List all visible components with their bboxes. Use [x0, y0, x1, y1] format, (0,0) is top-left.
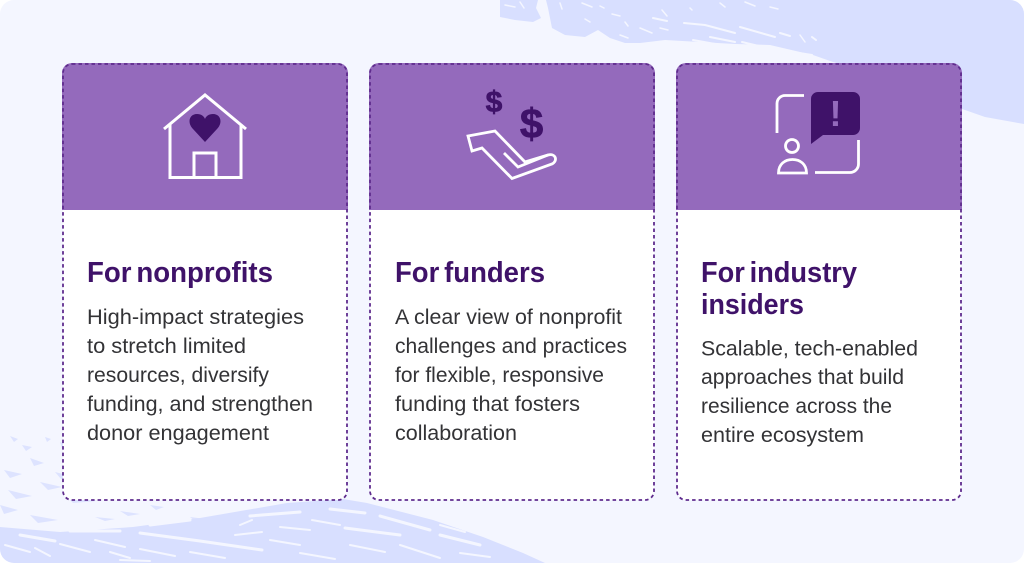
icon: person with alert bubble: [777, 92, 860, 173]
text: nonprofits description: donor engagement: [87, 421, 269, 445]
card: for industry insiders: [676, 63, 962, 500]
text: nonprofits description: resources, diversify: [87, 363, 269, 387]
text: funders description: [395, 305, 627, 445]
text: industry insiders description: [701, 336, 918, 447]
text: industry insiders description: Scalable, tech-enabled: [701, 336, 918, 360]
card header band: [676, 63, 962, 210]
icon: house with heart: [164, 95, 246, 178]
card dashed border: [63, 64, 347, 500]
heading: for industry insiders: insiders: [701, 289, 804, 321]
heading: for industry insiders: [701, 257, 857, 321]
card: for funders: [369, 63, 655, 500]
card body: [63, 64, 347, 500]
text: funders description: for flexible, responsive: [395, 363, 604, 387]
icon: hand with dollars: $: [520, 100, 543, 147]
text: nonprofits description: funding, and strengthen: [87, 392, 313, 416]
text: nonprofits description: to stretch limited: [87, 334, 246, 358]
text: funders description: challenges and practices: [395, 334, 627, 358]
card dashed border: [677, 64, 961, 500]
text: funders description: funding that fosters: [395, 392, 580, 416]
heading: for funders: For funders: [395, 257, 545, 289]
card header band: [369, 63, 655, 210]
text: industry insiders description: approaches that build: [701, 365, 904, 389]
text: industry insiders description: resilience across the: [701, 394, 892, 418]
heading: for industry insiders: For industry: [701, 257, 857, 289]
icon: hand with dollars: $: [486, 86, 503, 119]
card: for nonprofits: [62, 63, 348, 500]
card header band: [62, 63, 348, 210]
text: industry insiders description: entire ecosystem: [701, 423, 864, 447]
card body: [370, 64, 654, 500]
text: nonprofits description: [87, 305, 313, 445]
text: funders description: collaboration: [395, 421, 517, 445]
icon: person with alert bubble: !: [830, 93, 842, 134]
card body: [677, 64, 961, 500]
heading: for nonprofits: For nonprofits: [87, 257, 273, 289]
text: funders description: A clear view of nonprofit: [395, 305, 622, 329]
card dashed border: [370, 64, 654, 500]
text: nonprofits description: High-impact strategies: [87, 305, 304, 329]
icon: hand with dollars: [468, 86, 555, 178]
